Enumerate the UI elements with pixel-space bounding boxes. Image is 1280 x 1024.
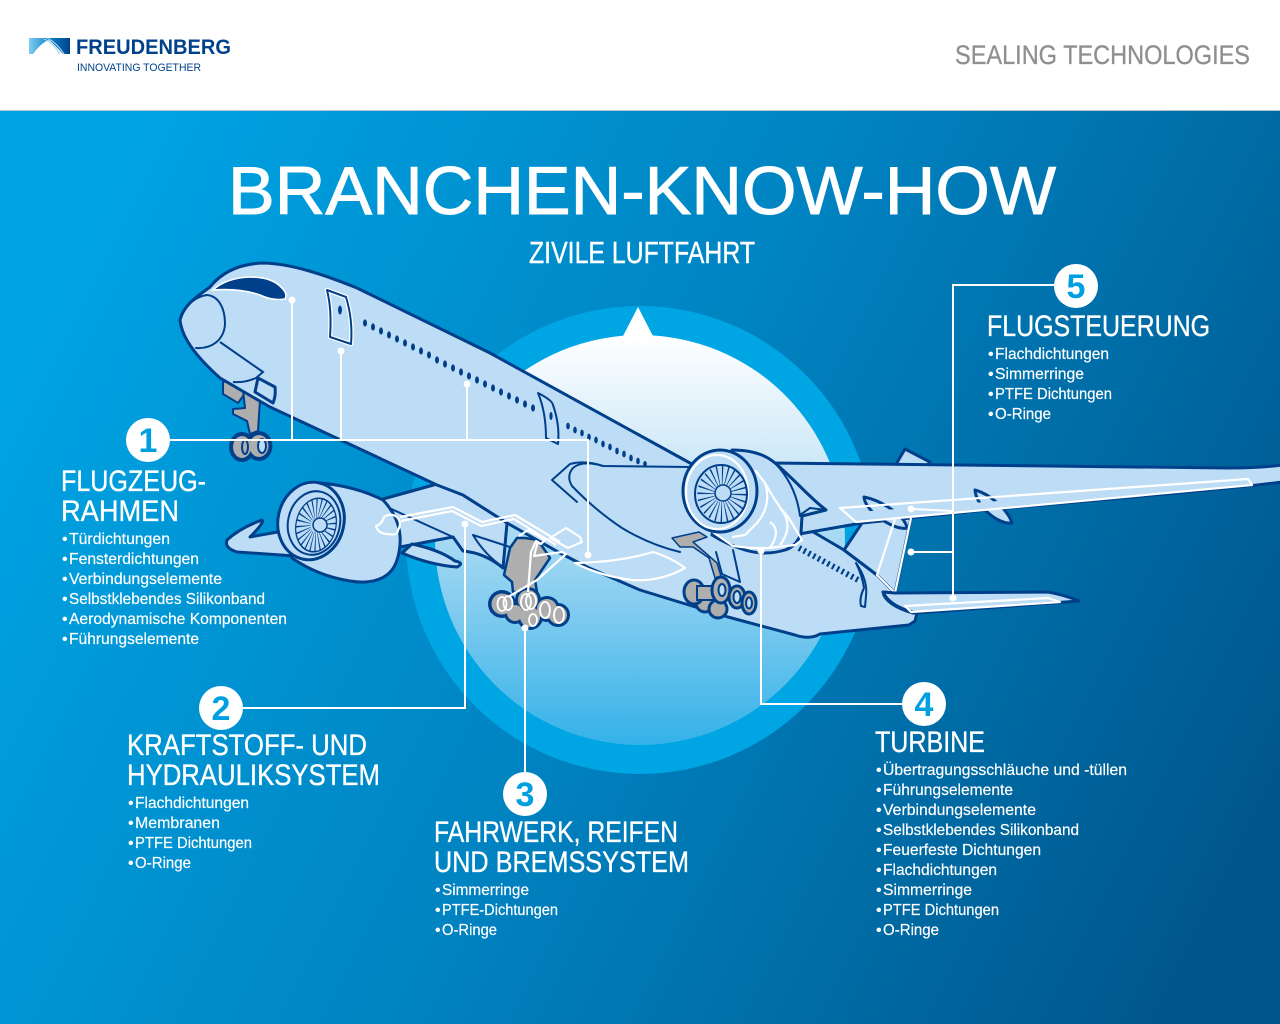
bullet list: •	[876, 782, 882, 799]
subtitle: ZIVILE LUFTFAHRT	[529, 235, 755, 270]
callout 5 line	[908, 285, 1055, 602]
fuel and hydraulic system	[376, 507, 582, 548]
bullet list: PTFE Dichtungen	[883, 902, 999, 919]
nacelle contour	[775, 463, 826, 516]
division name: SEALING TECHNOLOGIES	[955, 40, 1250, 70]
bullet list: •	[988, 366, 994, 383]
bullet list: •	[62, 631, 68, 648]
bullet list: Membranen	[135, 815, 220, 832]
heading	[434, 816, 689, 879]
bullet list: •	[988, 346, 994, 363]
bullet list: •	[62, 531, 68, 548]
bullet list: Simmerringe	[995, 366, 1084, 383]
bullet list	[62, 531, 287, 648]
bullet list	[128, 795, 252, 872]
nacelle	[712, 450, 826, 553]
bullet list: Verbindungselemente	[883, 802, 1036, 819]
bullet list: Simmerringe	[883, 882, 972, 899]
bullet list: Fensterdichtungen	[69, 551, 199, 568]
fan casing	[683, 450, 757, 532]
stabilizer	[883, 592, 1079, 613]
bullet list: Feuerfeste Dichtungen	[883, 842, 1041, 859]
bullet list: •	[128, 855, 134, 872]
wheel outline	[488, 587, 570, 630]
left wing	[226, 484, 513, 568]
bullet list: •	[876, 882, 882, 899]
wheels	[492, 590, 567, 627]
panel: Fahrwerk, Reifen und Bremssystem	[434, 772, 689, 939]
gear door	[716, 550, 740, 582]
front door	[327, 290, 351, 344]
airplane	[180, 263, 1280, 637]
bullet list: Türdichtungen	[69, 531, 170, 548]
bullet list: O-Ringe	[883, 922, 939, 939]
fuselage details	[180, 277, 866, 607]
callout 1 lines	[170, 296, 592, 558]
main landing gear (left)	[488, 538, 570, 630]
bullet list: •	[128, 835, 134, 852]
heading: HYDRAULIKSYSTEM	[127, 759, 380, 792]
callout 4 line	[758, 548, 902, 704]
logo tagline: INNOVATING TOGETHER	[77, 62, 201, 74]
panel: Kraftstoff- und Hydrauliksystem	[127, 686, 380, 872]
number badge 2: 2	[212, 690, 230, 728]
compass disc	[406, 306, 874, 774]
number badge 1: 1	[139, 422, 157, 460]
bullet list: Führungselemente	[69, 631, 199, 648]
rear wheels	[696, 594, 727, 618]
bullet list: Selbstklebendes Silikonband	[883, 822, 1079, 839]
bullet list: •	[876, 862, 882, 879]
wheel outlines	[498, 593, 564, 626]
windows row	[363, 319, 535, 412]
bullet list	[876, 761, 1127, 939]
heading: FLUGZEUG-	[61, 465, 206, 498]
bullet list: PTFE Dichtungen	[135, 835, 252, 852]
right engine	[683, 450, 826, 553]
bullet list: Übertragungsschläuche und -tüllen	[883, 761, 1127, 779]
bullet list: •	[62, 591, 68, 608]
undercarriage outline	[498, 530, 566, 626]
wing root	[552, 462, 690, 502]
panel: Flugzeugrahmen	[61, 418, 287, 648]
bullet list: Verbindungselemente	[69, 571, 222, 588]
bullet list	[435, 882, 558, 939]
heading: FAHRWERK, REIFEN	[434, 816, 678, 849]
left engine	[271, 476, 400, 582]
gear leg	[672, 532, 721, 578]
heading	[127, 729, 380, 792]
bullet list	[988, 346, 1112, 423]
fuselage	[180, 263, 917, 637]
nose landing gear	[223, 378, 272, 462]
bullet list: •	[988, 386, 994, 403]
number badge 4: 4	[915, 686, 934, 724]
panel: Flugsteuerung	[987, 264, 1210, 423]
icon: logo wave	[29, 38, 70, 54]
bullet list: •	[128, 795, 134, 812]
bullet list: PTFE-Dichtungen	[442, 902, 558, 919]
bullet list: Flachdichtungen	[883, 862, 997, 879]
number badge 5	[1054, 264, 1098, 308]
bullet list: Simmerringe	[442, 882, 529, 899]
number badge 1	[126, 418, 170, 462]
tail door	[856, 563, 866, 607]
bullet list: •	[876, 802, 882, 819]
bullet list: •	[435, 902, 441, 919]
radome	[180, 295, 225, 348]
header bar	[0, 0, 1280, 111]
bullet list: Selbstklebendes Silikonband	[69, 591, 265, 608]
logo	[29, 36, 231, 59]
windows row tail	[799, 548, 860, 581]
bullet list: •	[876, 902, 882, 919]
number badge 3: 3	[516, 776, 534, 814]
heading: TURBINE	[875, 726, 985, 759]
right wing	[770, 463, 1280, 593]
bullet list: •	[988, 406, 994, 423]
bullet list: O-Ringe	[135, 855, 191, 872]
bullet list: Flachdichtungen	[135, 795, 249, 812]
bullet list: O-Ringe	[995, 406, 1051, 423]
heading: KRAFTSTOFF- UND	[127, 729, 367, 762]
bullet list: Flachdichtungen	[995, 346, 1109, 363]
callout 2 line	[243, 520, 468, 708]
windows row aft	[566, 423, 647, 467]
heading	[61, 465, 206, 528]
bullet list: •	[62, 551, 68, 568]
main landing gear (right)	[672, 532, 756, 618]
flap fairing outline	[575, 552, 685, 580]
bullet list: •	[62, 571, 68, 588]
callout 3 line	[522, 624, 528, 772]
number badge 5: 5	[1067, 268, 1085, 306]
bullet list: •	[876, 822, 882, 839]
fan	[695, 465, 747, 523]
number badge 3	[503, 772, 547, 816]
panel: Turbine	[875, 682, 1127, 939]
bullet list: Führungselemente	[883, 782, 1013, 799]
gear leg	[504, 538, 550, 592]
bullet list: Aerodynamische Komponenten	[69, 611, 287, 628]
bullet list: •	[435, 882, 441, 899]
bullet list: O-Ringe	[442, 922, 497, 939]
heading: FLUGSTEUERUNG	[987, 310, 1210, 343]
number badge 4	[902, 682, 946, 726]
far wingtip	[895, 449, 930, 467]
heading: UND BREMSSYSTEM	[434, 846, 689, 879]
bullet list: PTFE Dichtungen	[995, 386, 1112, 403]
bullet list: •	[435, 922, 441, 939]
windshield	[213, 277, 286, 300]
front wheels	[684, 577, 756, 614]
title: BRANCHEN-KNOW-HOW	[228, 153, 1056, 229]
logo wordmark: FREUDENBERG	[76, 36, 231, 59]
bullet list: •	[876, 842, 882, 859]
bullet list: •	[876, 922, 882, 939]
bullet list: •	[62, 611, 68, 628]
heading: RAHMEN	[61, 495, 179, 528]
bullet list: •	[128, 815, 134, 832]
nose gear door	[220, 342, 263, 382]
number badge 2	[199, 686, 243, 730]
core outline	[710, 470, 802, 548]
bullet list: •	[876, 762, 882, 779]
rear door	[538, 393, 558, 444]
